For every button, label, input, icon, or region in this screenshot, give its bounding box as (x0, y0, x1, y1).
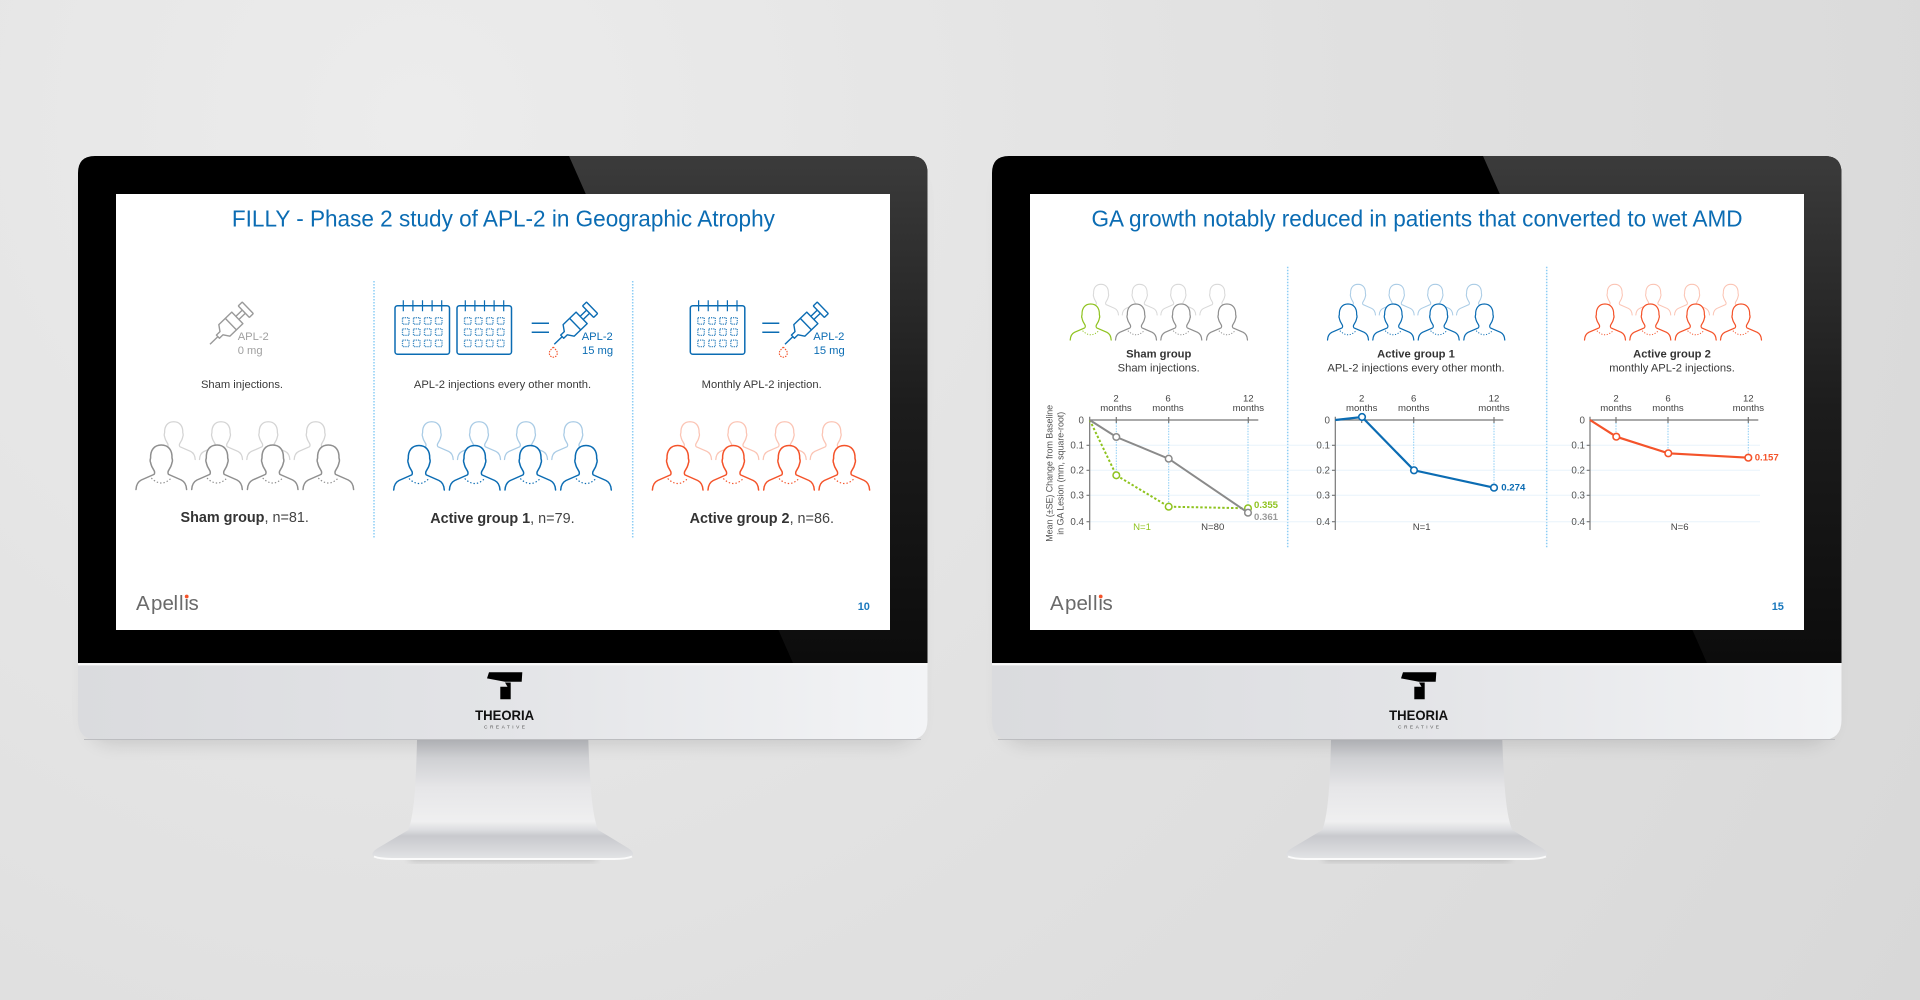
caption: monthly injections: monthly APL-2 injections. (1609, 363, 1735, 375)
x axis labels: 6 (1665, 394, 1671, 405)
x axis labels: 2 (1613, 394, 1619, 405)
x axis labels: months (1652, 403, 1684, 414)
x axis labels: 2 (1113, 394, 1119, 405)
iMac right (992, 156, 1842, 860)
Apellis logo: Apellis (1050, 592, 1113, 615)
x axis labels: 6 (1411, 394, 1416, 405)
sample size N=1: N=1 (1133, 522, 1151, 533)
brand logo left: THEORIA (475, 707, 534, 723)
y axis ticks: 0.2 (1571, 465, 1585, 476)
brand logo right: THEORIA (1389, 707, 1448, 723)
y axis ticks: 0.1 (1070, 440, 1084, 451)
y axis ticks: 0 (1325, 416, 1331, 426)
brand logo right (1389, 707, 1448, 730)
icon: two calendars (395, 300, 512, 354)
brand logo right: CREATIVE (1398, 724, 1439, 730)
y axis ticks: 0.2 (1316, 465, 1330, 476)
y axis ticks: 0.3 (1316, 490, 1331, 501)
x axis labels: 2 (1359, 394, 1364, 405)
x axis labels: months (1233, 403, 1264, 414)
page number: 10 (858, 601, 870, 613)
value 0.355: 0.355 (1254, 500, 1279, 511)
y axis ticks: 0 (1079, 416, 1085, 426)
x axis labels: 6 (1165, 394, 1171, 405)
brand logo left (475, 707, 534, 730)
y axis ticks: 0.1 (1316, 440, 1330, 451)
people: sham group, one converted (1070, 284, 1247, 340)
panel: sham group (1044, 284, 1279, 542)
icon: equals sign (762, 323, 779, 332)
y axis ticks: 0.4 (1070, 517, 1085, 528)
icon: equals sign (532, 323, 549, 332)
dose label 15 mg: APL-2 (813, 331, 844, 343)
x axis labels: months (1733, 403, 1764, 414)
slide 1: FILLY study (136, 206, 870, 615)
column divider 2 (1546, 267, 1548, 548)
x axis labels: months (1398, 403, 1430, 414)
icon: grey syringe (204, 302, 253, 350)
panel: active group 1 (1316, 284, 1526, 533)
y axis ticks: 0.4 (1571, 517, 1586, 528)
line chart: sham group (1044, 394, 1279, 542)
people: active group 1 (394, 422, 611, 490)
panel: sham group (136, 302, 354, 526)
y axis ticks: 0.3 (1571, 490, 1586, 501)
x axis labels: 12 (1243, 394, 1254, 405)
x axis labels: 12 (1743, 394, 1754, 405)
brand logo left: CREATIVE (484, 724, 525, 730)
icon: one calendar (690, 300, 745, 354)
series: active group 2 (1590, 420, 1752, 461)
caption: every other month: APL-2 injections every other month. (1327, 363, 1505, 375)
icon: blue syringe with drop (549, 302, 598, 357)
y axis ticks: 0.2 (1070, 465, 1084, 476)
Apellis logo: Apellis (136, 592, 199, 615)
y axis ticks: 0.1 (1571, 440, 1585, 451)
icon: blue syringe with drop (779, 302, 828, 357)
people: sham group (136, 422, 354, 490)
x axis labels: months (1600, 403, 1632, 414)
slide 2: GA growth (1044, 206, 1784, 615)
dose label 15 mg: 15 mg (814, 345, 845, 357)
people: active group 2 (652, 422, 870, 490)
sample size N=1: N=1 (1413, 522, 1431, 533)
panel: active group 2 (1571, 284, 1779, 533)
y axis ticks: 0.3 (1070, 490, 1085, 501)
slide 1 title: FILLY - Phase 2 study of APL-2 in Geographic Atrophy (232, 206, 775, 232)
dose label 0 mg: APL-2 (238, 331, 269, 343)
column divider 1 (1287, 267, 1289, 548)
panel: active group 1 (394, 300, 613, 527)
group label: active group 2 n=86: Active group 2, n=86. (690, 511, 834, 527)
sample size N=80: N=80 (1201, 522, 1224, 533)
value 0.274: 0.274 (1501, 483, 1526, 494)
group label: sham group n=81: Sham group, n=81. (181, 510, 309, 526)
series: sham patients (1090, 420, 1251, 516)
x axis labels: months (1152, 403, 1184, 414)
column divider 1 (373, 281, 375, 538)
caption: sham injections: Sham injections. (201, 379, 283, 391)
people: active group 2 (1585, 284, 1761, 340)
line chart: active group 1 (1316, 394, 1526, 533)
value 0.157: 0.157 (1755, 453, 1779, 464)
dose label 0 mg: 0 mg (238, 345, 263, 357)
page number: 15 (1772, 601, 1784, 613)
slide 2 title: GA growth notably reduced in patients that converted to wet AMD (1092, 206, 1742, 232)
column divider 2 (632, 281, 634, 538)
caption: sham injections: Sham injections. (1118, 363, 1200, 375)
caption: monthly injection: Monthly APL-2 injection. (702, 379, 822, 391)
x axis labels: months (1478, 403, 1510, 414)
x axis labels: months (1346, 403, 1378, 414)
line chart: active group 2 (1571, 394, 1779, 533)
group label: active group 1 n=79: Active group 1, n=79. (430, 511, 575, 527)
y axis title: Mean (±SE) Change from Baseline (1044, 405, 1054, 542)
value 0.361: 0.361 (1254, 512, 1279, 523)
heading: active group 2: Active group 2 (1633, 348, 1711, 360)
y axis title: in GA Lesion (mm, square-root) (1055, 412, 1065, 535)
x axis labels: months (1100, 403, 1132, 414)
heading: sham group: Sham group (1126, 348, 1191, 360)
dose label 15 mg: APL-2 (582, 331, 613, 343)
sample size N=6: N=6 (1671, 522, 1689, 533)
series: converted patient (1090, 420, 1251, 512)
y axis ticks: 0.4 (1316, 517, 1331, 528)
x axis labels: 12 (1489, 394, 1499, 405)
series: active group 1 (1335, 414, 1497, 491)
iMac left (78, 156, 928, 860)
chart gridlines (1090, 445, 1760, 522)
people: active group 1 (1328, 284, 1505, 340)
heading: active group 1: Active group 1 (1377, 348, 1455, 360)
caption: every other month: APL-2 injections every other month. (414, 379, 591, 391)
panel: active group 2 (652, 300, 870, 527)
y axis ticks: 0 (1580, 416, 1586, 426)
dose label 15 mg: 15 mg (582, 345, 613, 357)
